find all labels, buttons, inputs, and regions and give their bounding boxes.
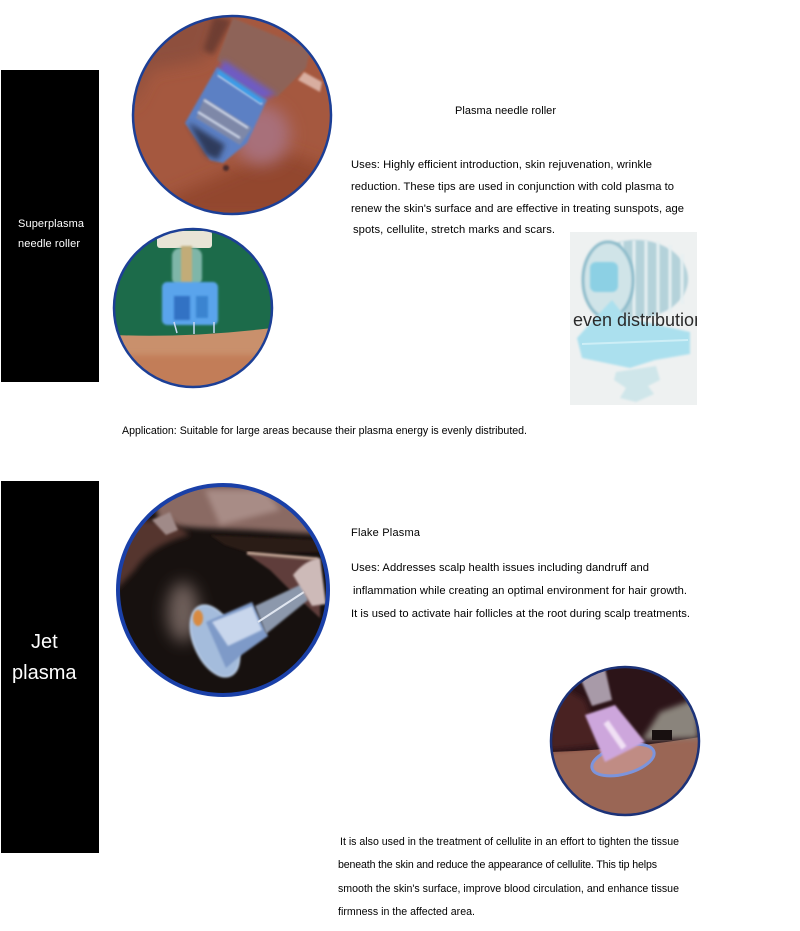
text block: roller uses bbox=[351, 159, 684, 236]
text block: flake plasma uses bbox=[351, 562, 690, 620]
text block: flake plasma uses: Uses: Addresses scalp health issues including dandruff and bbox=[351, 562, 649, 574]
image: even distribution roller tip: even distribution bbox=[573, 310, 704, 330]
panel: superplasma needle roller label bbox=[1, 70, 99, 382]
photo: roller tip above skin on green bbox=[112, 228, 274, 390]
text block: cellulite treatment: It is also used in the treatment of cellulite in an effort to tighten the tissue bbox=[340, 836, 679, 848]
photo: flake plasma on scalp bbox=[116, 484, 330, 696]
title: plasma needle roller: Plasma needle roller bbox=[455, 105, 556, 117]
text block: cellulite treatment: beneath the skin and reduce the appearance of cellulite. This tip helps bbox=[338, 859, 657, 871]
image: even distribution roller tip bbox=[570, 232, 704, 405]
text block: flake plasma uses: It is used to activate hair follicles at the root during scalp treatments. bbox=[351, 608, 690, 620]
heading: flake plasma: Flake Plasma bbox=[351, 527, 421, 539]
photo: roller tip on skin bbox=[130, 10, 335, 220]
panel: jet plasma label: plasma bbox=[12, 662, 77, 684]
text: application: Application: Suitable for large areas because their plasma energy is evenly distributed. bbox=[122, 425, 527, 437]
photo: flake plasma on skin bbox=[550, 664, 700, 816]
text block: flake plasma uses: inflammation while creating an optimal environment for hair growth. bbox=[353, 585, 687, 597]
text block: cellulite treatment: firmness in the affected area. bbox=[338, 906, 475, 918]
panel: jet plasma label bbox=[1, 481, 99, 853]
text block: cellulite treatment: smooth the skin's surface, improve blood circulation, and enhance tissue bbox=[338, 883, 679, 895]
text block: roller uses: Uses: Highly efficient introduction, skin rejuvenation, wrinkle bbox=[351, 159, 652, 171]
panel: superplasma needle roller label: Superplasma bbox=[18, 218, 85, 230]
panel: jet plasma label: Jet bbox=[31, 631, 58, 653]
text block: roller uses: reduction. These tips are used in conjunction with cold plasma to bbox=[351, 181, 674, 193]
text block: roller uses: renew the skin's surface and are effective in treating sunspots, age bbox=[351, 203, 684, 215]
panel: superplasma needle roller label: needle roller bbox=[18, 238, 80, 250]
text block: roller uses: spots, cellulite, stretch marks and scars. bbox=[353, 224, 555, 236]
text block: cellulite treatment bbox=[338, 836, 679, 918]
